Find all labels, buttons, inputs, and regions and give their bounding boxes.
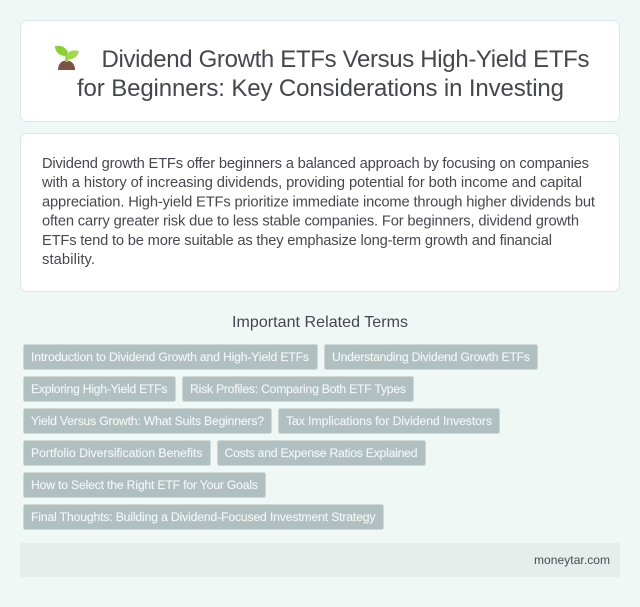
text block: summary paragraph bbox=[41, 156, 595, 268]
tag: Tax Implications for Dividend Investors bbox=[286, 414, 492, 428]
panel: related terms tags bbox=[24, 344, 538, 530]
tag bbox=[24, 376, 176, 402]
text block: summary paragraph: often carry greater risk due to less stable companies. For beginners, dividend growth bbox=[42, 214, 579, 230]
icon: seedling bbox=[55, 46, 79, 70]
heading: important related terms: Important Related Terms bbox=[232, 314, 408, 331]
tag: Yield Versus Growth: What Suits Beginners? bbox=[31, 414, 264, 428]
tag bbox=[278, 408, 500, 434]
tag: How to Select the Right ETF for Your Goals bbox=[31, 478, 258, 492]
panel: title card bbox=[20, 20, 620, 122]
tag: Exploring High-Yield ETFs bbox=[31, 382, 168, 396]
text block: summary paragraph: with a history of increasing dividends, providing potential for both income and capital bbox=[41, 175, 582, 191]
tag bbox=[24, 472, 266, 498]
title: Dividend Growth ETFs Versus High-Yield ETFs bbox=[102, 46, 590, 73]
tag: Introduction to Dividend Growth and High-Yield ETFs bbox=[31, 350, 309, 364]
text block: summary paragraph: Dividend growth ETFs offer beginners a balanced approach by focusing on companies bbox=[42, 156, 589, 172]
text block: summary paragraph: ETFs tend to be more suitable as they emphasize long-term growth and financial bbox=[42, 233, 552, 249]
tag: Final Thoughts: Building a Dividend-Focused Investment Strategy bbox=[31, 510, 376, 524]
title: for Beginners: Key Considerations in Investing bbox=[77, 75, 564, 102]
footer bbox=[20, 543, 620, 577]
tag: Portfolio Diversification Benefits bbox=[31, 446, 202, 460]
tag bbox=[24, 440, 210, 466]
panel: summary card bbox=[20, 134, 620, 292]
tag bbox=[24, 344, 318, 370]
tag: Understanding Dividend Growth ETFs bbox=[332, 350, 530, 364]
text block: summary paragraph: appreciation. High-yield ETFs prioritize immediate income through higher dividends but bbox=[42, 194, 595, 210]
tag bbox=[24, 504, 384, 530]
footer credit: moneytar.com bbox=[534, 553, 610, 567]
text block: summary paragraph: stability. bbox=[42, 252, 95, 268]
tag: Risk Profiles: Comparing Both ETF Types bbox=[190, 382, 406, 396]
tag bbox=[218, 440, 426, 466]
title bbox=[77, 46, 590, 102]
tag: Costs and Expense Ratios Explained bbox=[224, 446, 418, 460]
tag bbox=[24, 408, 272, 434]
tag bbox=[182, 376, 414, 402]
tag bbox=[324, 344, 538, 370]
